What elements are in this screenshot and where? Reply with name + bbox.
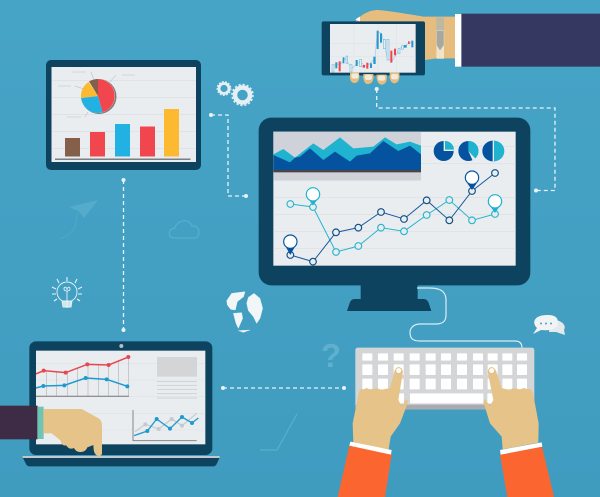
laptop lid: [29, 341, 212, 455]
monitor screen: [273, 132, 516, 266]
connector: laptop to keyboard: [221, 386, 346, 390]
icon: speech bubbles: [533, 315, 565, 335]
monitor frame: [259, 118, 530, 285]
laptop base: [23, 456, 220, 466]
pie chart: [58, 72, 135, 117]
icon: gears: [217, 82, 253, 106]
fingers: [350, 73, 400, 85]
right sleeve: [500, 447, 554, 497]
laptop screen: [36, 351, 205, 444]
watch strap: [436, 17, 444, 59]
monitor: [259, 118, 530, 311]
icon: pencil: [260, 414, 297, 450]
suit sleeve: [461, 14, 600, 67]
icon: cloud: [169, 221, 199, 238]
hand back: [356, 10, 455, 60]
tablet with pie and bar chart: [46, 60, 201, 170]
connector: phone to monitor: [375, 87, 555, 192]
icon: light bulb: [52, 277, 82, 308]
connector: tablet to monitor: [209, 113, 248, 198]
map pins: [284, 171, 502, 255]
small line chart: [133, 410, 198, 441]
hand pointing on laptop: [0, 406, 102, 456]
right cuff: [500, 442, 542, 455]
right arm and hand on keyboard: [484, 368, 554, 497]
area chart: [273, 132, 421, 181]
bar chart: [55, 109, 190, 160]
right hand: [484, 369, 539, 449]
keyboard cable: [410, 288, 522, 348]
camera: [119, 344, 123, 348]
text placeholder: [157, 357, 197, 398]
line chart: red and blue: [33, 355, 130, 397]
shirt cuff: [455, 14, 461, 67]
icon: globe: [227, 292, 263, 332]
laptop: [0, 341, 220, 466]
icon: question mark: ?: [321, 337, 341, 374]
phone screen with candlesticks: [330, 24, 416, 73]
left cuff: [349, 442, 392, 455]
connector: tablet to laptop: [122, 178, 126, 332]
small pie charts: [434, 141, 504, 161]
line chart: [287, 170, 498, 265]
left sleeve: [338, 446, 392, 497]
stand: [347, 283, 431, 311]
keyboard: [355, 348, 534, 409]
icon: paper plane: [60, 200, 98, 239]
left arm and hand on keyboard: [338, 368, 408, 497]
left hand: [353, 369, 408, 449]
phone held by hand: [322, 10, 600, 85]
phone body: [322, 21, 425, 75]
